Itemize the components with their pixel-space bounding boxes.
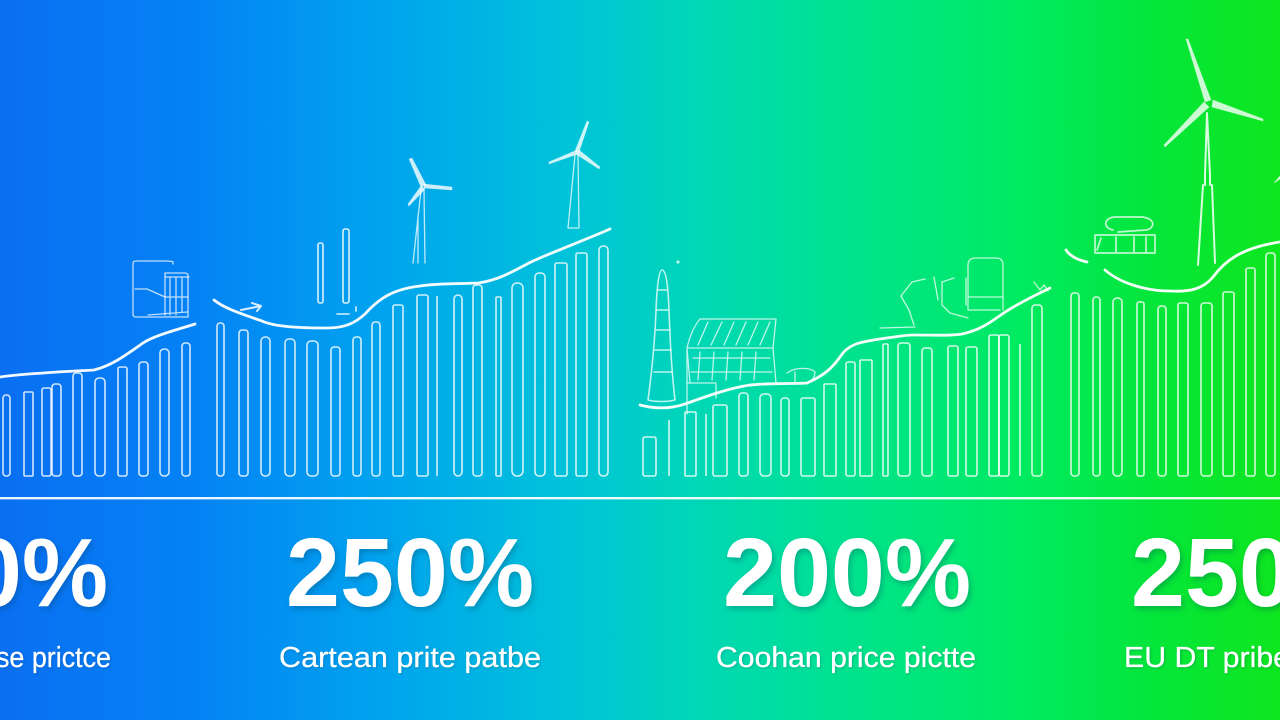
baseline divider [0, 497, 1280, 499]
icon: storage tanks [1095, 217, 1155, 253]
trend line 4 [1066, 242, 1280, 291]
icon: wind turbine left [408, 158, 452, 263]
icon: machinery right [880, 258, 1048, 328]
bar chart: group 4 [1071, 253, 1275, 476]
icon: wind turbine right [1164, 39, 1280, 265]
stat 2: label: Cartean prite patbe [279, 642, 541, 674]
stat 3: label: Coohan price pictte [716, 642, 976, 674]
icon: cooling tower [648, 261, 679, 402]
trend line 3 [640, 288, 1050, 408]
stat 2: value: 250% [286, 518, 534, 627]
stat 4: label: EU DT pribe [1124, 642, 1280, 674]
icon: wind turbine centre [549, 121, 600, 228]
icon: greenhouse building [687, 319, 815, 414]
bar chart: group 3 [643, 305, 1042, 476]
trend line 2 [214, 229, 610, 328]
stat 3: value: 200% [723, 518, 971, 627]
bar chart: group 1 [3, 343, 190, 476]
icon: factory left [133, 261, 189, 317]
bar chart: group 2 [217, 246, 608, 476]
trend line 1 [0, 324, 195, 377]
icon: chimney pair [241, 229, 356, 314]
